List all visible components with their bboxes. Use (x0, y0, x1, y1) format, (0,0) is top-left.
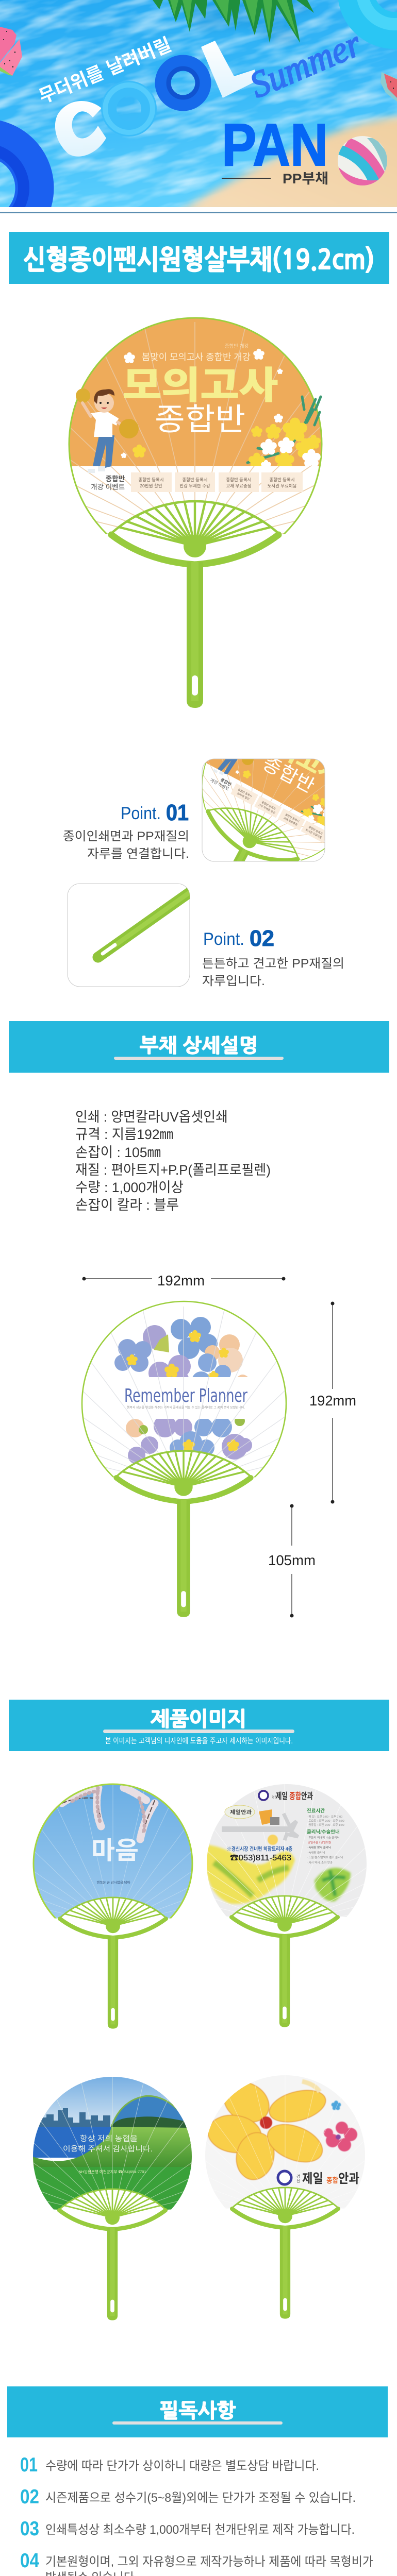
clinic map (222, 1805, 298, 1845)
small top copy: 종합반 개강 (225, 344, 249, 349)
clinic logo: 제일 종합안과 (302, 2172, 359, 2186)
notice 01: 01 (20, 2454, 38, 2476)
fan frame and handle (223, 2188, 348, 2319)
flower artwork bottom (126, 1415, 252, 1464)
clinic hours text: · 시시 약시, 소아 안과 (307, 1860, 333, 1865)
point 01 text (63, 800, 189, 861)
flower artwork top (114, 1317, 248, 1377)
fan frame and handle (50, 2189, 175, 2320)
watermelon right (381, 72, 397, 101)
hero banner (0, 0, 397, 207)
event boxes: 교재 무료증정 (226, 483, 252, 488)
clinic hours text: · 녹내장 클리닉 (307, 1851, 325, 1855)
dimension: height 192mm: 192mm (309, 1393, 356, 1409)
notice list (20, 2454, 373, 2576)
product fan: yellow flower (205, 2075, 365, 2319)
letter O light ring (105, 85, 153, 132)
swim ring top right (356, 0, 397, 30)
small blue flower (332, 2100, 341, 2110)
notice 04 (20, 2550, 373, 2576)
clinic hours text: · 공휴일 : 오전 9:00 - 오후 1:00 (307, 1823, 344, 1827)
clinic hours text: · 흔들리 백내장 수술 클리닉 (307, 1836, 340, 1840)
point 02 text: Point. (203, 929, 244, 949)
fan outline (82, 1301, 286, 1505)
dimension fan with flower design (81, 1300, 287, 1617)
spec list (75, 1109, 271, 1213)
clinic hours text: 클리닉/수술안내 (307, 1829, 340, 1835)
heading: product image bar: 제품이미지 (151, 1709, 246, 1729)
clinic logo (259, 1791, 313, 1801)
point 02 text: 02 (250, 926, 274, 951)
flower accents top (121, 349, 283, 458)
illustration: cheering boy (76, 388, 139, 473)
point 01 detail image (202, 758, 325, 861)
notice 03 (20, 2518, 355, 2540)
illustration: flower bouquet (133, 397, 321, 470)
notice 02 (20, 2486, 356, 2508)
point 01 text: Point. (121, 804, 161, 823)
product fan: cherry blossom (33, 1784, 193, 2029)
point 01 text: 01 (166, 800, 189, 825)
fan title white: 종합반 (155, 402, 245, 437)
event boxes: 인강 무제한 수강 (179, 483, 210, 488)
point 02 text (202, 926, 344, 988)
clinic phone: ☎053)811-5463 (230, 1854, 291, 1862)
dimension: width 192mm (82, 1273, 286, 1289)
fan artwork orange panel (67, 314, 325, 466)
notice 04: 04 (20, 2550, 39, 2572)
fan subtitle: 봄맞이 모의고사 종합반 개강 (142, 352, 251, 362)
clinic hours text: · 드림 렌즈/콘택트 렌즈 클리닉 (307, 1855, 343, 1859)
calligraphy title: 마음 (91, 1837, 139, 1865)
big blue swim ring left (0, 138, 35, 238)
clinic hours text: 당일수술 / 당일퇴원 (308, 1840, 331, 1844)
spec list: 수량 : 1,000개이상 (75, 1180, 184, 1195)
fan frame and handle (51, 1897, 175, 2029)
Summer script: Summer (244, 23, 367, 106)
thank-you copy (63, 2134, 153, 2154)
lower green band (34, 2167, 191, 2210)
PP label: PP부채 (283, 171, 328, 187)
notice 04: 기본원형이며, 그외 자유형으로 제작가능하나 제품에 따라 목형비가 (45, 2555, 373, 2569)
notice 01 (20, 2454, 319, 2476)
spec list: 손잡이 : 105㎜ (75, 1145, 161, 1160)
green field (31, 2125, 196, 2169)
event boxes: 종합반 등록시 (182, 477, 208, 482)
event boxes: 종합반 등록시 (269, 477, 295, 482)
dimension: height 192mm (309, 1301, 356, 1503)
fan frame and handle (105, 1451, 262, 1617)
clinic hours text: · 토요일 : 오전 9:00 - 오후 5:00 (307, 1819, 344, 1823)
heading: must-read notice bar (7, 2386, 388, 2437)
small caption: 행복은 곧 감사함을 담아 (96, 1880, 130, 1885)
palm leaves (153, 0, 315, 43)
hero divider strip (0, 212, 397, 213)
clinic logo: 제일 종합안과 (276, 1791, 313, 1801)
fan outline (69, 318, 322, 570)
notice 03: 03 (20, 2518, 39, 2540)
leaf artwork (205, 1844, 351, 1904)
spec list: 손잡이 칼라 : 블루 (75, 1197, 179, 1213)
dimension: handle 105mm: 105mm (268, 1552, 316, 1568)
notice 01: 수량에 따라 단가가 상이하니 대량은 별도상담 바랍니다. (45, 2459, 319, 2473)
arched sky panel (111, 2096, 188, 2127)
spec list: 재질 : 편아트지+P.P(폴리프로필렌) (75, 1162, 271, 1178)
yellow flower art (205, 2074, 357, 2183)
clinic logo: 신 (296, 2179, 300, 2183)
watermelon left (0, 27, 22, 76)
heading: product image bar (9, 1700, 389, 1751)
thank-you copy: 이용해 주셔서 감사합니다. (63, 2145, 153, 2154)
PAN wordmark: PAN (222, 111, 328, 178)
letter O dark ring (163, 63, 203, 103)
event label: 종합반 (106, 475, 125, 483)
beach ball (338, 136, 387, 185)
remember planner text: Remember Planner (124, 1385, 247, 1406)
clinic logo: 경신 (272, 1795, 277, 1799)
hill with trees (111, 2116, 189, 2128)
remember planner caption: 행복과 성공을 현실화 해주는 기적의 플래닝을 익힐 수 있는 플래너로 그 꿈의 분의 모델입니다. (127, 1405, 245, 1410)
thank-you copy: 항상 저희 농협을 (80, 2134, 138, 2143)
panel: fan title background (150, 1377, 250, 1419)
clinic logo (278, 2171, 359, 2186)
product fan: city and field (33, 2077, 192, 2320)
letter C (55, 101, 106, 157)
notice 02: 02 (20, 2486, 39, 2508)
clinic address: ※경신시장 건너편 히잠트리자 4층 (227, 1845, 292, 1852)
point 01 text: 종이인쇄면과 PP재질의 (63, 829, 189, 843)
point 01 text: 자루를 연결합니다. (87, 847, 189, 861)
spec list: 인쇄 : 양면칼라UV옵셋인쇄 (75, 1109, 228, 1125)
main fan product (68, 317, 325, 861)
clinic logo: 경 (296, 2174, 300, 2179)
event boxes: 20만원 할인 (140, 483, 162, 488)
water (33, 2127, 111, 2158)
point 02 text: 튼튼하고 견고한 PP재질의 (202, 957, 344, 971)
PP rule line (222, 178, 271, 179)
clinic hours text: · 녹내장 망막 클리닉 (307, 1845, 331, 1850)
heading: product title bar (9, 232, 389, 284)
fan plastic frame and handle (97, 501, 293, 708)
clinic hours text: 진료시간 (307, 1808, 325, 1814)
event boxes: 종합반 등록시 (138, 477, 164, 482)
notice 03: 인쇄특성상 최소수량 1,000개부터 천개단위로 제작 가능합니다. (45, 2523, 355, 2537)
heading: must-read notice bar: 필독사항 (160, 2401, 236, 2420)
event label (91, 475, 125, 491)
clinic hours text (307, 1808, 344, 1865)
pink flower art (324, 2122, 357, 2151)
dimension: width 192mm: 192mm (157, 1273, 205, 1289)
point 02 text: 자루입니다. (202, 974, 265, 988)
clinic hours text: · 평 일 : 오전 9:00 - 오후 7:00 (307, 1815, 342, 1819)
point 02 detail image (68, 884, 193, 987)
cherry blossoms (62, 1784, 155, 1839)
notice 02: 시즌제품으로 성수기(5~8월)외에는 단가가 조정될 수 있습니다. (45, 2491, 356, 2505)
event boxes: 도서관 무료이용 (267, 483, 297, 488)
skyline (36, 2108, 110, 2130)
headline: rotated Korean copy: 무더위를 날려버릴 (34, 30, 175, 109)
bank contact line: NH농협은행 예천군지부 ☎054)654-7701 (78, 2169, 146, 2174)
dimension: handle 105mm (268, 1504, 316, 1618)
event boxes: 종합반 등록시 (226, 477, 252, 482)
event label: 개강 이벤트 (91, 483, 125, 491)
clinic map: 제일안과 (230, 1809, 252, 1816)
sand beach (175, 116, 397, 214)
product fan: eye clinic map (207, 1784, 367, 2027)
heading: detail description bar (9, 1021, 389, 1073)
fan title yellow: 모의고사 (123, 365, 278, 406)
heading: detail description bar: 부채 상세설명 (140, 1036, 258, 1055)
letter L (201, 41, 257, 98)
fan frame and handle (222, 1896, 347, 2027)
heading: product image bar: 본 이미지는 고객님의 디자인에 도움을 주고자 제시하는 이미지입니다. (105, 1737, 293, 1745)
event boxes (131, 472, 303, 492)
spec list: 규격 : 지름192㎜ (75, 1127, 173, 1142)
